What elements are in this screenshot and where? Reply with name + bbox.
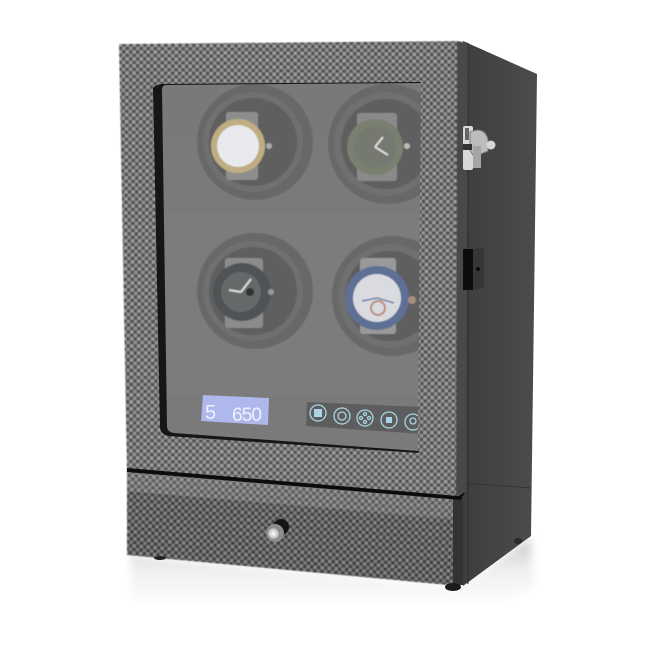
- watch bottom left: black dial: [213, 258, 274, 328]
- watch bottom right: blue bezel: [345, 258, 416, 334]
- window recess shadow: [153, 82, 421, 453]
- cabinet feet: [154, 538, 522, 591]
- LCD screen: [201, 395, 269, 426]
- button: light: [405, 414, 421, 430]
- winder cradle bottom left: [197, 233, 313, 349]
- front panel: carbon fibre frame: [119, 41, 468, 498]
- button: programs: [310, 405, 326, 421]
- button: rotation: [334, 408, 350, 424]
- side socket block: [463, 248, 484, 290]
- side panel of cabinet: [463, 41, 537, 586]
- button: stop: [381, 412, 397, 428]
- drawer knob: [266, 519, 289, 542]
- metal latch hinge: [463, 126, 496, 170]
- watch top left: gold bezel: [211, 112, 272, 180]
- glass window: [162, 83, 421, 451]
- winder cradle top right: [328, 84, 421, 204]
- product illustration: watch winder cabinet: [118, 40, 537, 591]
- button: four winders: [357, 410, 373, 426]
- watch top right: green dial: [347, 113, 410, 181]
- drawer: [127, 468, 465, 586]
- LCD screen: 5: [205, 402, 216, 424]
- winder cradle top left: [197, 84, 313, 200]
- touch control panel: [306, 402, 422, 434]
- LCD screen: 650: [232, 405, 262, 426]
- floor reflection: [130, 538, 534, 606]
- winder cradle bottom right: [332, 236, 420, 356]
